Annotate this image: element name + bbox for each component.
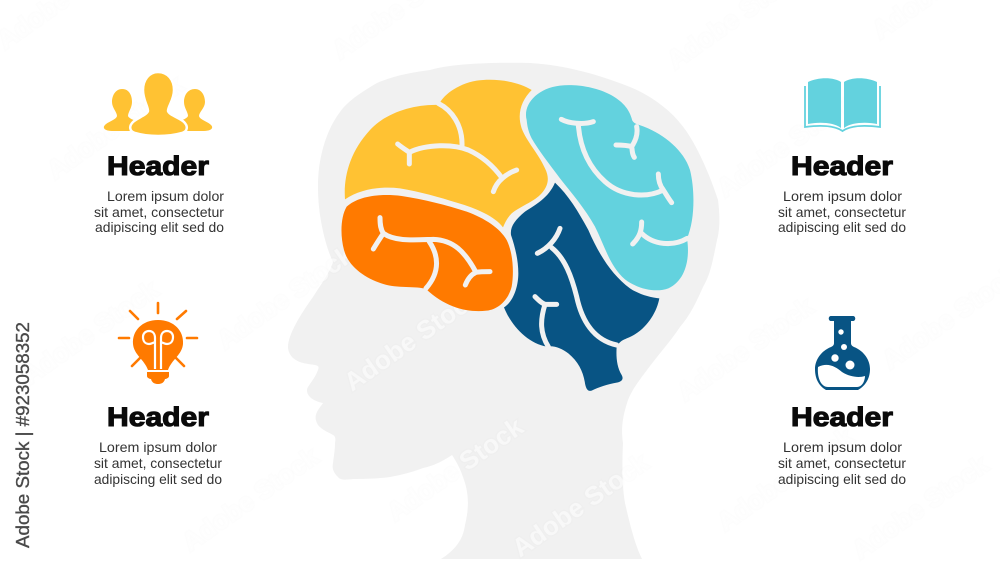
- icon: book: [805, 78, 880, 131]
- text block: Lorem ipsum dolor: [783, 439, 902, 455]
- panel: bottom-right flask: [778, 316, 906, 487]
- watermarks: Adobe Stock: [846, 449, 994, 562]
- heading: Header: [107, 402, 210, 432]
- text block: adipiscing elit sed do: [778, 471, 906, 487]
- brain lobe: yellow: [345, 80, 548, 227]
- watermarks: Adobe Stock: [671, 291, 819, 407]
- watermarks: Adobe Stock: [711, 421, 859, 537]
- brain lobe: navy: [504, 183, 659, 391]
- watermarks: Adobe Stock: [176, 441, 324, 557]
- text block: Lorem ipsum dolor: [107, 188, 224, 204]
- heading: Header: [791, 402, 894, 432]
- text block: sit amet, consectetur: [778, 204, 906, 220]
- panel: top-left people: [94, 72, 224, 235]
- icon: people: [104, 72, 212, 136]
- text block: sit amet, consectetur: [94, 455, 222, 471]
- vertical stock credit: Adobe Stock | #923058352: [13, 322, 33, 548]
- watermarks: Adobe Stock: [711, 87, 859, 203]
- text block: adipiscing elit sed do: [778, 219, 906, 235]
- text block: adipiscing elit sed do: [94, 471, 222, 487]
- heading: Header: [107, 151, 210, 181]
- text block: adipiscing elit sed do: [95, 219, 224, 235]
- head silhouette: [288, 63, 719, 559]
- watermarks: Adobe Stock: [338, 281, 486, 397]
- icon: flask: [815, 316, 870, 390]
- watermarks: Adobe Stock: [506, 447, 654, 562]
- brain lobe: orange: [341, 195, 513, 311]
- heading: Header: [791, 151, 894, 181]
- icon: light bulb: [119, 303, 197, 384]
- panel: bottom-left bulb: [94, 303, 222, 487]
- watermarks: Adobe Stock: [381, 411, 529, 527]
- watermarks: Adobe Stock: [211, 239, 359, 355]
- panel: top-right book: [778, 78, 906, 235]
- text block: sit amet, consectetur: [778, 455, 906, 471]
- watermarks: Adobe Stock: [41, 69, 189, 185]
- text block: sit amet, consectetur: [94, 204, 224, 220]
- brain lobe: teal: [526, 85, 693, 290]
- text block: Lorem ipsum dolor: [783, 188, 902, 204]
- text block: Lorem ipsum dolor: [99, 439, 217, 455]
- brain: [341, 80, 693, 391]
- watermarks: Adobe Stock: [16, 274, 164, 390]
